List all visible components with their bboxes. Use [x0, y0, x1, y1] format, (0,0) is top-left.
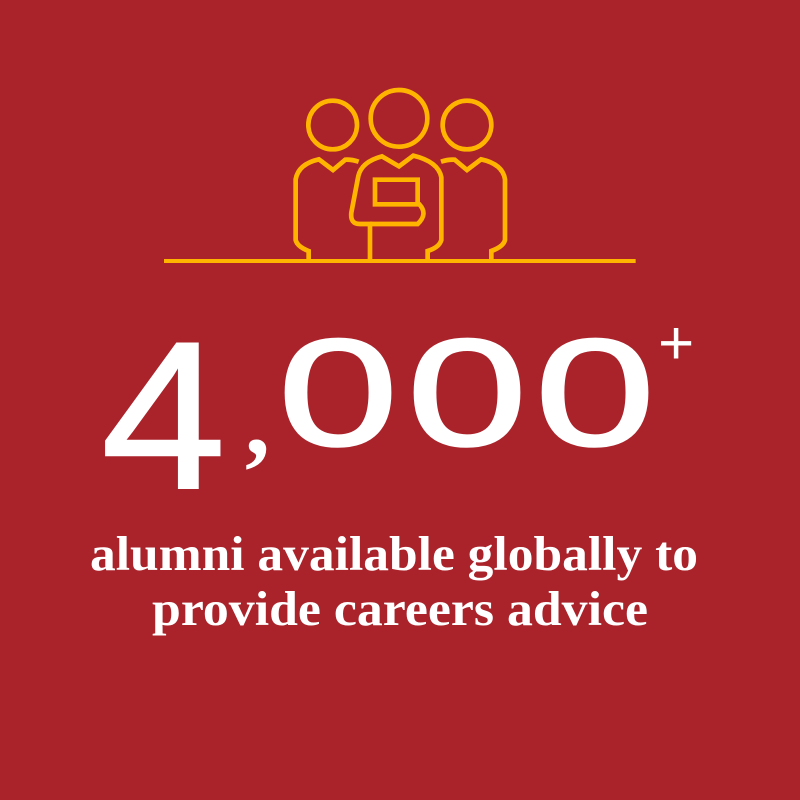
caption text: provide careers advice — [152, 581, 648, 636]
big number 4,000+: 0 — [407, 307, 527, 478]
big number 4,000+ — [101, 299, 694, 533]
caption text: alumni available globally to — [90, 526, 698, 581]
big number 4,000+: 4 — [101, 299, 226, 533]
icon: three people with a laptop behind a line — [164, 90, 636, 261]
big number 4,000+: 0 — [278, 307, 398, 478]
big number 4,000+: 0 — [535, 307, 655, 478]
caption text — [90, 526, 698, 636]
big number 4,000+: + — [658, 309, 694, 378]
big number 4,000+: , — [245, 365, 270, 476]
